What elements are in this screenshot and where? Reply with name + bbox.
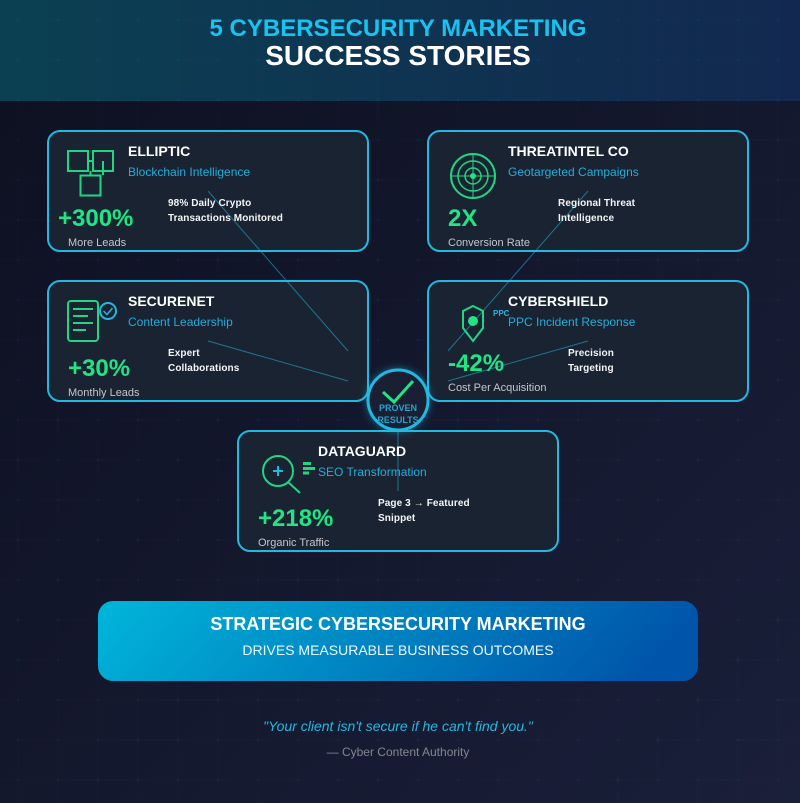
icon: shield: [463, 306, 483, 341]
icon: check mark: [383, 381, 413, 402]
description: Targeting: [568, 363, 614, 374]
stat label: Monthly Leads: [68, 387, 140, 399]
icon: blockchain blocks: [68, 151, 113, 196]
company name: ELLIPTIC: [128, 143, 190, 159]
icon: target radar: [451, 154, 495, 198]
panel: ThreatIntel Co: [428, 131, 748, 251]
title: SUCCESS STORIES: [265, 40, 531, 71]
description: Collaborations: [168, 363, 240, 374]
stat: 2X: [448, 205, 477, 232]
company name: THREATINTEL CO: [508, 143, 629, 159]
description: Precision: [568, 348, 614, 359]
description: 98% Daily Crypto: [168, 198, 251, 209]
icon: magnifier with bars: [263, 456, 315, 493]
badge text: PROVEN: [379, 403, 417, 413]
company name: CYBERSHIELD: [508, 293, 608, 309]
description: Page 3 → Featured: [378, 498, 470, 509]
description: Transactions Monitored: [168, 213, 283, 224]
badge text: RESULTS: [377, 415, 419, 425]
stat: +300%: [58, 205, 133, 232]
stat: +218%: [258, 505, 333, 532]
connector lines to badge: [208, 191, 588, 491]
description: Snippet: [378, 513, 416, 524]
campaign type: Content Leadership: [128, 315, 233, 329]
title: 5 CYBERSECURITY MARKETING: [210, 15, 586, 42]
banner heading: STRATEGIC CYBERSECURITY MARKETING: [210, 614, 586, 634]
panel: SecureNet: [48, 281, 368, 401]
campaign type: SEO Transformation: [318, 465, 427, 479]
banner subheading: DRIVES MEASURABLE BUSINESS OUTCOMES: [242, 642, 554, 658]
stat: -42%: [448, 350, 504, 377]
description: Expert: [168, 348, 200, 359]
icon: document with check: [68, 301, 116, 341]
stat label: Organic Traffic: [258, 537, 330, 549]
campaign type: Geotargeted Campaigns: [508, 165, 639, 179]
stat label: More Leads: [68, 237, 127, 249]
quote: "Your client isn't secure if he can't find you.": [263, 718, 534, 734]
badge: proven results: [367, 369, 429, 431]
panel: CyberShield: [428, 281, 748, 401]
panel: Elliptic: [48, 131, 368, 251]
banner: takeaway: [98, 601, 698, 681]
quote attribution: — Cyber Content Authority: [327, 745, 469, 759]
company name: SECURENET: [128, 293, 215, 309]
stat: +30%: [68, 355, 130, 382]
company name: DATAGUARD: [318, 443, 406, 459]
campaign type: Blockchain Intelligence: [128, 165, 250, 179]
campaign type: PPC Incident Response: [508, 315, 636, 329]
PPC tag: PPC: [493, 309, 510, 318]
description: Regional Threat: [558, 198, 636, 209]
stat label: Conversion Rate: [448, 237, 530, 249]
panel: DataGuard: [238, 431, 558, 551]
title: [210, 15, 586, 71]
description: Intelligence: [558, 213, 615, 224]
stat label: Cost Per Acquisition: [448, 382, 546, 394]
header band: [0, 0, 800, 101]
